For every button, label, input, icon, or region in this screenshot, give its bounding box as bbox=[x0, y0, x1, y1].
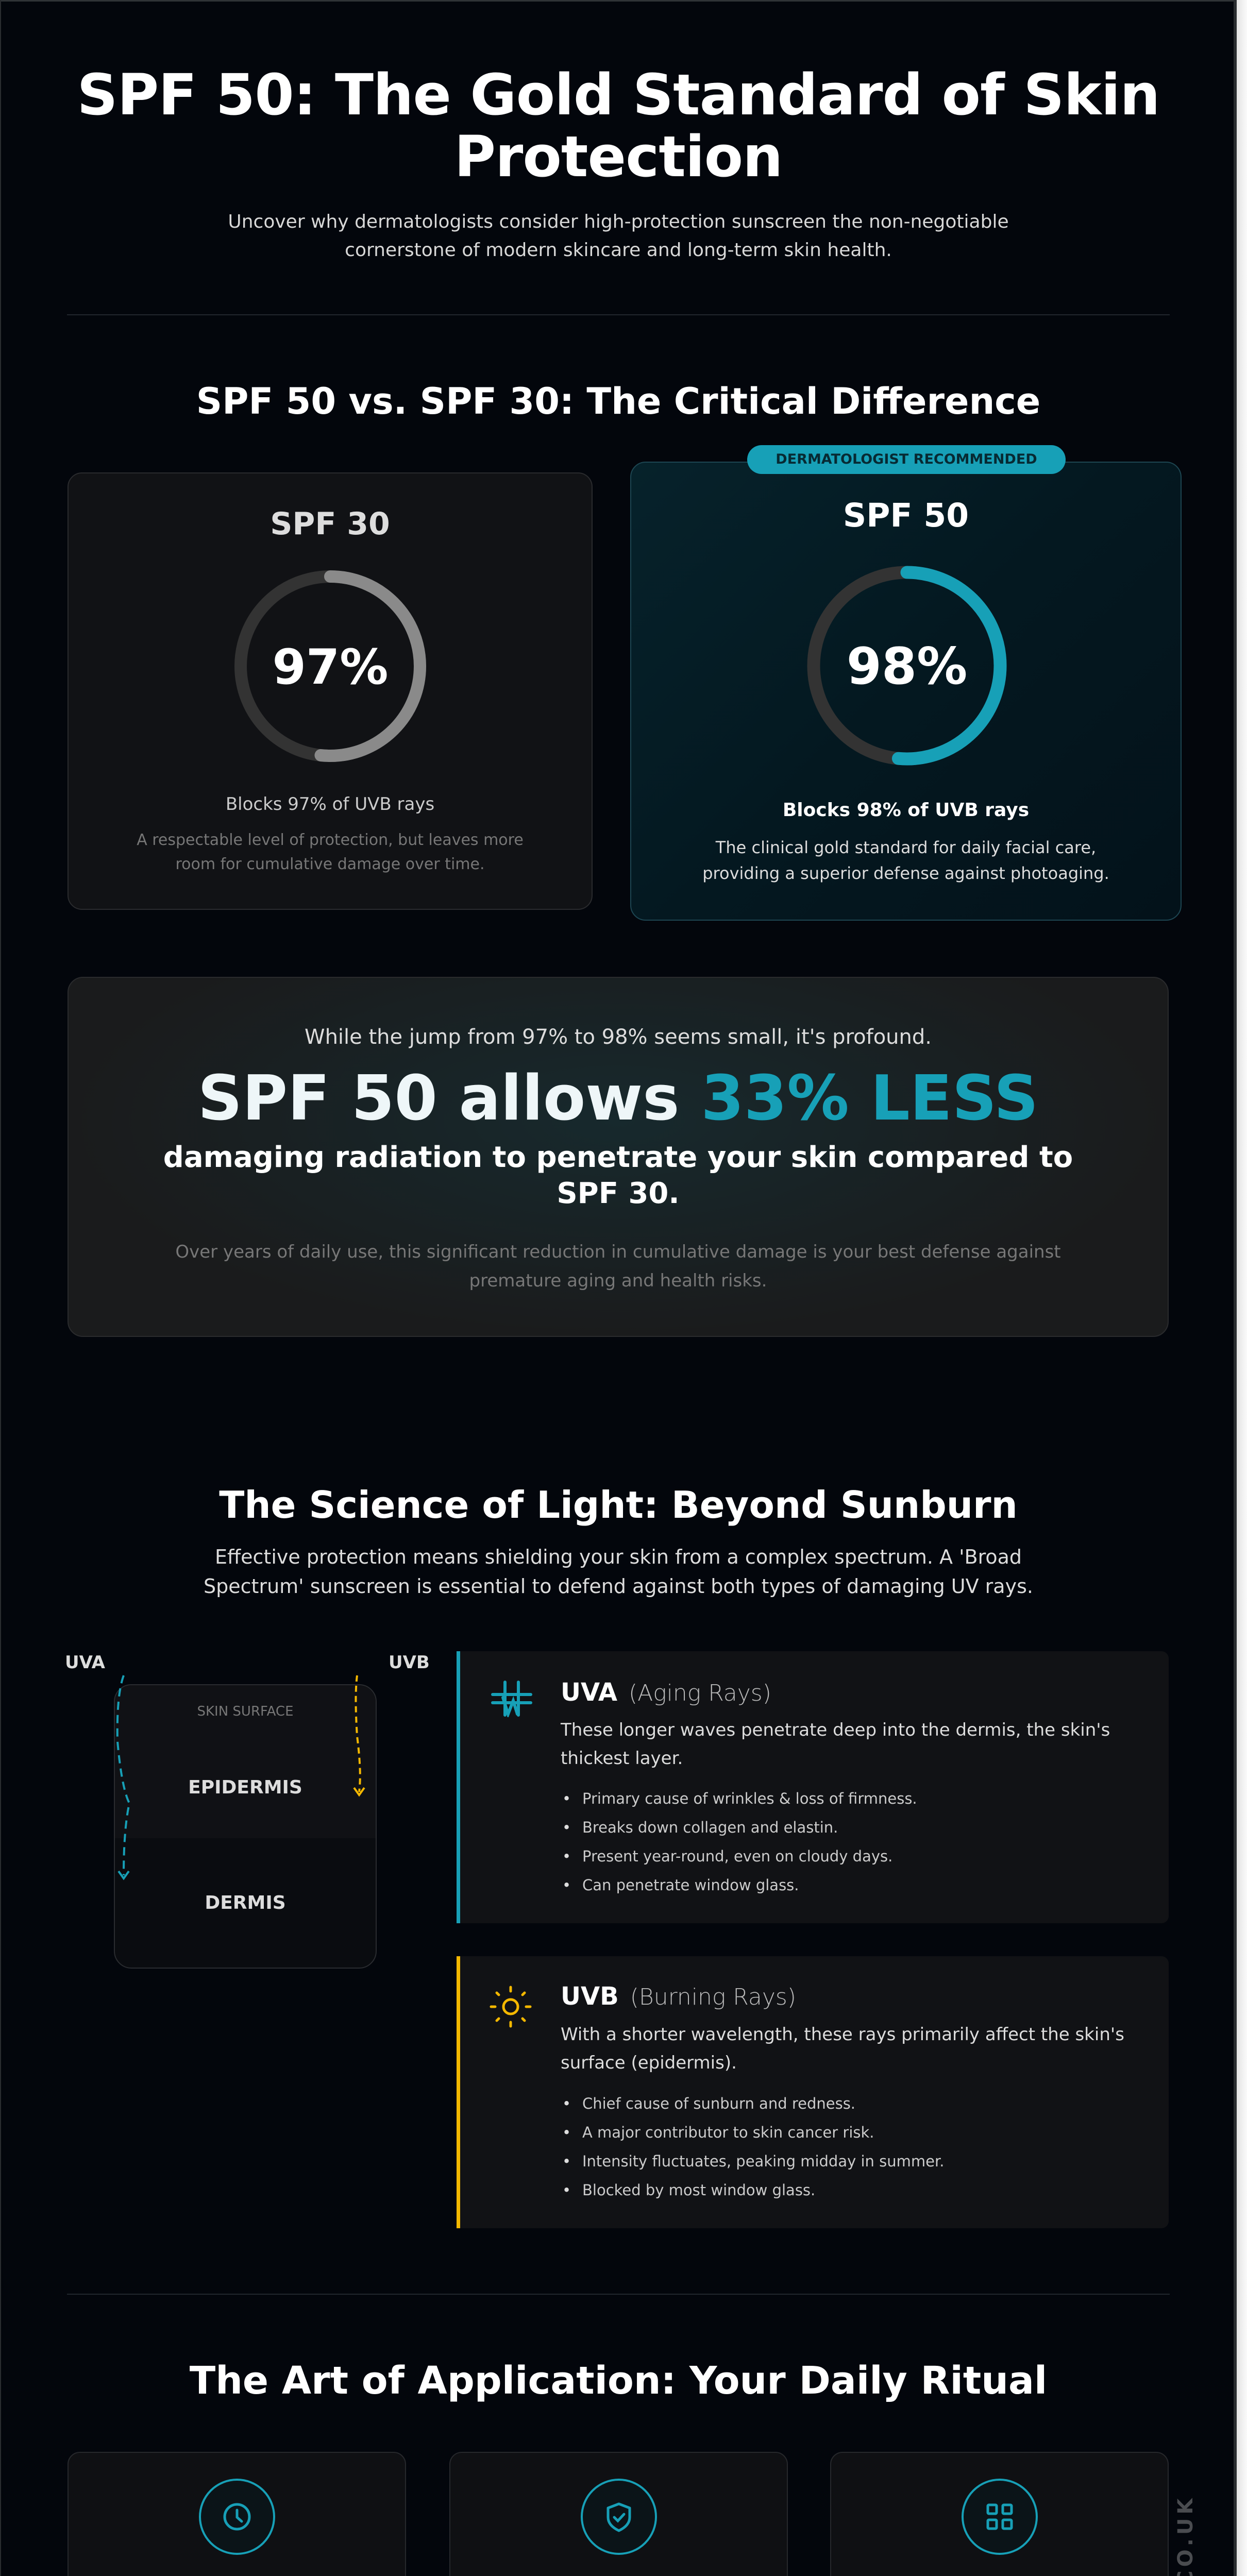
science subtitle bbox=[204, 1546, 1033, 1598]
icon: grid bbox=[962, 2479, 1038, 2555]
statement continuation bbox=[163, 1141, 1073, 1210]
panel: UVA bbox=[457, 1651, 1169, 1923]
panel: apply generously bbox=[68, 2452, 406, 2576]
UVA title: UVA (Aging Rays) bbox=[561, 1678, 771, 1707]
statement continuation: SPF 30. bbox=[557, 1177, 680, 1210]
subtitle bbox=[228, 211, 1009, 261]
UVB bullet list: Blocked by most window glass. bbox=[582, 2181, 815, 2199]
heading: science: The Science of Light: Beyond Sunburn bbox=[219, 1483, 1018, 1527]
lead text: While the jump from 97% to 98% seems small, it's profound. bbox=[305, 1025, 932, 1049]
UVA label: UVA bbox=[65, 1652, 105, 1673]
big statement: SPF 50 allows 33% LESS bbox=[198, 1063, 1038, 1134]
heading: application: The Art of Application: Your Daily Ritual bbox=[190, 2359, 1047, 2403]
SPF 30 label: SPF 30 bbox=[270, 506, 390, 542]
panel: SPF 30 card bbox=[68, 472, 593, 910]
dermis label: DERMIS bbox=[205, 1892, 286, 1913]
description bbox=[702, 838, 1109, 883]
UVB bullet list bbox=[564, 2095, 944, 2199]
footnote: Over years of daily use, this significant reduction in cumulative damage is your best defense against bbox=[175, 1242, 1061, 1262]
diagram: skin layers bbox=[65, 1652, 430, 1969]
UVA bullet list: Present year-round, even on cloudy days. bbox=[582, 1848, 892, 1865]
callout: 33% less bbox=[68, 977, 1169, 1337]
panel: final step bbox=[449, 2452, 788, 2576]
UVA bullet list: Breaks down collagen and elastin. bbox=[582, 1819, 838, 1836]
skin box bbox=[114, 1684, 377, 1969]
description bbox=[137, 831, 524, 873]
footnote: premature aging and health risks. bbox=[469, 1270, 767, 1291]
description: The clinical gold standard for daily facial care, bbox=[716, 838, 1096, 857]
description: A respectable level of protection, but leaves more bbox=[137, 831, 524, 849]
title bbox=[852, 2573, 1147, 2576]
UVA bullet list: Can penetrate window glass. bbox=[582, 1876, 799, 1894]
panel: SPF 50 card bbox=[630, 462, 1182, 921]
icon: shield bbox=[581, 2479, 657, 2555]
UVB description: With a shorter wavelength, these rays primarily affect the skin's surface (epidermis). bbox=[561, 2024, 1124, 2073]
panel: UVB bbox=[457, 1956, 1169, 2228]
icon: sun bbox=[490, 1986, 532, 2028]
SPF 50 label: SPF 50 bbox=[843, 497, 969, 534]
title bbox=[77, 62, 1160, 190]
icon: clock bbox=[199, 2479, 275, 2555]
skin surface label: SKIN SURFACE bbox=[197, 1704, 294, 1719]
title: Protection bbox=[454, 124, 782, 190]
ring chart 98% bbox=[807, 566, 1007, 766]
caption: Blocks 98% of UVB rays bbox=[783, 800, 1029, 821]
title: SPF 50: The Gold Standard of Skin bbox=[77, 62, 1160, 128]
subtitle: cornerstone of modern skincare and long-term skin health. bbox=[345, 240, 892, 261]
description: room for cumulative damage over time. bbox=[175, 855, 485, 873]
icon: UVA waves bbox=[491, 1681, 532, 1717]
ring chart 98%: 98% bbox=[847, 637, 967, 696]
arrows: UVA and UVB rays bbox=[116, 1675, 365, 1880]
ring chart 97% bbox=[234, 570, 426, 762]
UVB title: UVB (Burning Rays) bbox=[561, 1982, 796, 2011]
panel: reapply bbox=[830, 2452, 1169, 2576]
science subtitle: Effective protection means shielding your skin from a complex spectrum. A 'Broad bbox=[215, 1546, 1022, 1568]
footnote bbox=[175, 1242, 1061, 1291]
UVB bullet list: A major contributor to skin cancer risk. bbox=[582, 2124, 874, 2141]
epidermis label: EPIDERMIS bbox=[188, 1777, 302, 1798]
caption: Blocks 97% of UVB rays bbox=[226, 794, 434, 815]
UVB label: UVB bbox=[389, 1652, 430, 1673]
UVA description: These longer waves penetrate deep into the dermis, the skin's thickest layer. bbox=[561, 1720, 1110, 1769]
subtitle: Uncover why dermatologists consider high-protection sunscreen the non-negotiable bbox=[228, 211, 1009, 232]
description: providing a superior defense against photoaging. bbox=[702, 863, 1109, 883]
ring chart 97%: 97% bbox=[272, 639, 389, 696]
UVB bullet list: Chief cause of sunburn and redness. bbox=[582, 2095, 855, 2112]
UVA bullet list: Primary cause of wrinkles & loss of firmness. bbox=[582, 1790, 917, 1807]
title bbox=[89, 2573, 384, 2576]
heading: comparison: SPF 50 vs. SPF 30: The Critical Difference bbox=[196, 380, 1040, 422]
title bbox=[471, 2573, 766, 2576]
science subtitle: Spectrum' sunscreen is essential to defend against both types of damaging UV rays. bbox=[204, 1575, 1033, 1598]
badge bbox=[747, 445, 1066, 474]
badge: DERMATOLOGIST RECOMMENDED bbox=[776, 451, 1037, 467]
UVA bullet list bbox=[564, 1790, 917, 1894]
UVB bullet list: Intensity fluctuates, peaking midday in summer. bbox=[582, 2153, 944, 2170]
statement continuation: damaging radiation to penetrate your skin compared to bbox=[163, 1141, 1073, 1174]
